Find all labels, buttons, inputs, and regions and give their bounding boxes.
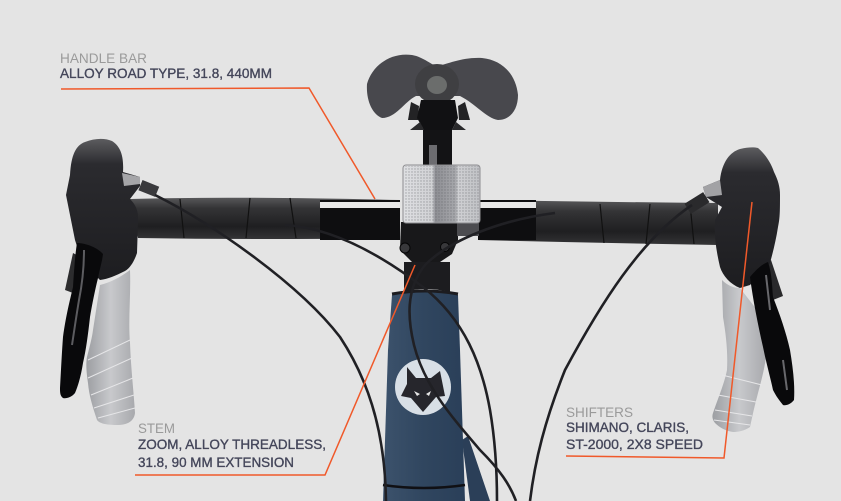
left shifter <box>60 139 159 398</box>
left grip <box>86 270 135 425</box>
leader line: shifters <box>566 202 752 458</box>
label: stem <box>138 420 326 470</box>
stem clamp <box>400 222 479 262</box>
leader line: handle bar <box>61 88 375 199</box>
frame: head tube with down tube <box>383 291 490 501</box>
label: stem: ZOOM, ALLOY THREADLESS, <box>138 436 326 452</box>
leader line: stem <box>135 265 415 475</box>
label: shifters: ST-2000, 2X8 SPEED <box>566 436 703 452</box>
bell and saddle-shaped mount <box>367 55 518 130</box>
right shifter <box>684 147 794 405</box>
stem post <box>404 125 452 292</box>
handlebar: left side <box>130 198 400 240</box>
label: stem: 31.8, 90 MM EXTENSION <box>138 454 294 470</box>
label: stem: STEM <box>138 420 175 436</box>
brake and shift cables <box>155 195 692 501</box>
handlebar: right side <box>478 200 718 245</box>
label: shifters: SHIMANO, CLARIS, <box>566 419 689 435</box>
reflector <box>403 165 480 223</box>
label: shifters: SHIFTERS <box>566 404 633 420</box>
label: shifters <box>566 404 703 452</box>
right grip <box>712 280 766 432</box>
logo: fox head badge <box>395 359 451 415</box>
label: handle bar <box>60 50 272 81</box>
label: handle bar: HANDLE BAR <box>60 50 147 66</box>
label: handle bar: ALLOY ROAD TYPE, 31.8, 440MM <box>60 65 272 81</box>
